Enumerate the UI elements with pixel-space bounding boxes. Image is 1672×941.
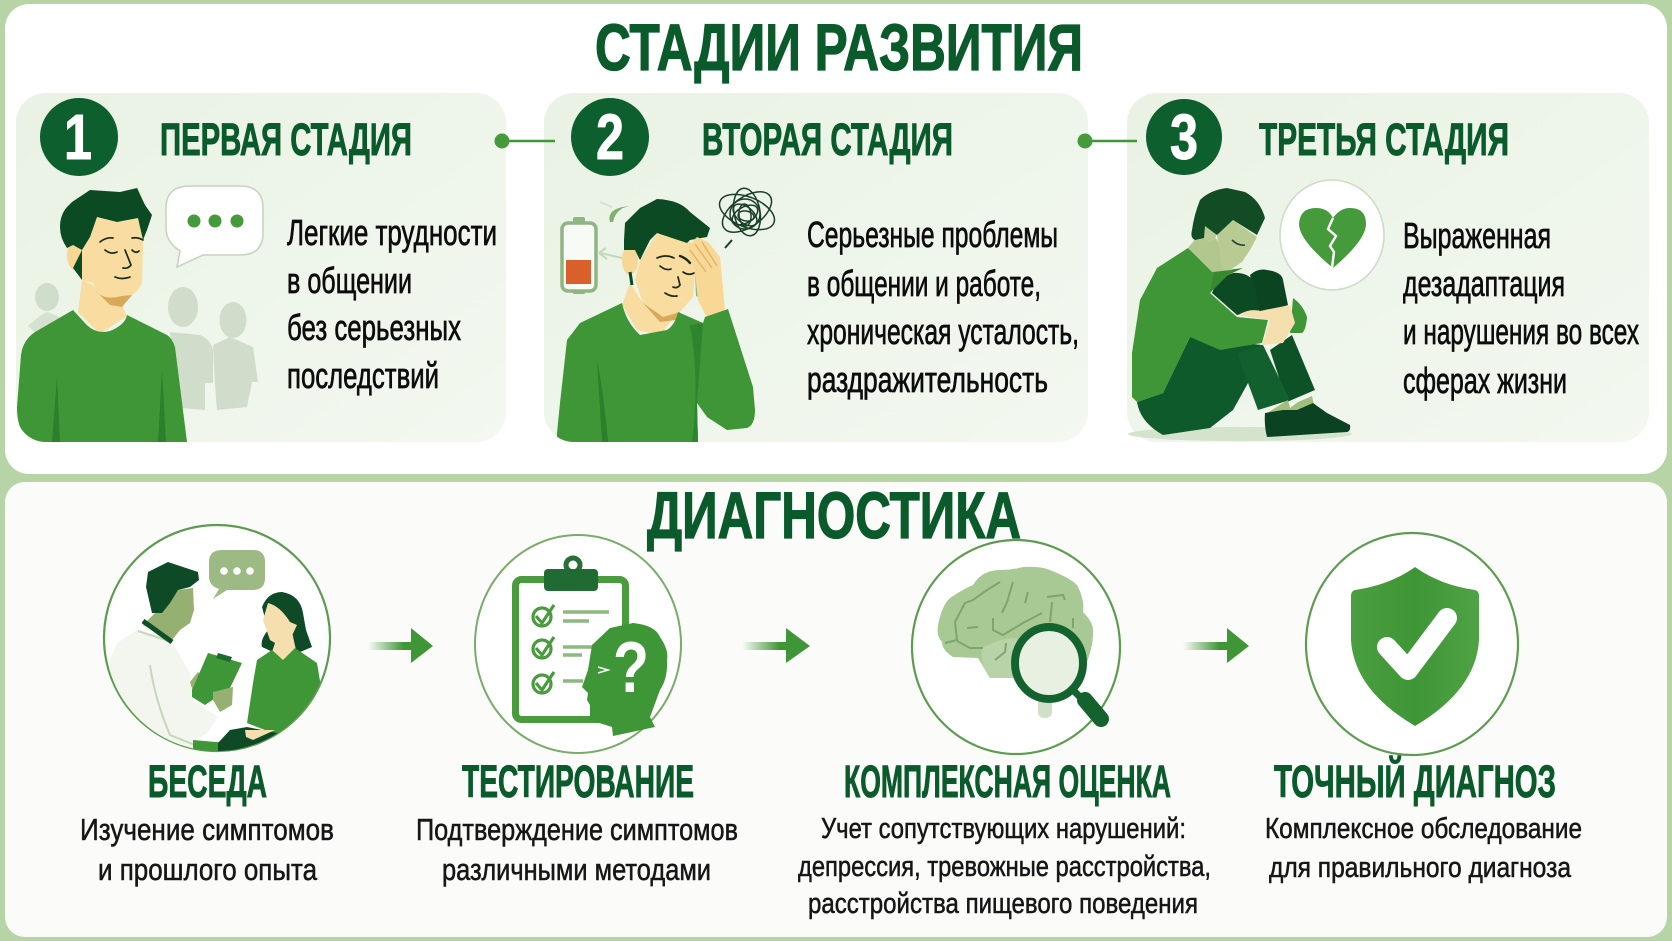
arrow: step 1 to 2 [368, 628, 433, 663]
text: first stage description: в общении [287, 260, 412, 301]
card: third stage [1127, 93, 1649, 442]
icon: number 1 badge: 1 [64, 101, 92, 173]
text: complex assessment description: расстройства пищевого поведения [808, 888, 1198, 920]
text: third stage description: дезадаптация [1403, 263, 1565, 304]
step: accurate diagnosis [1265, 533, 1582, 884]
title: diagnostics: ДИАГНОСТИКА [647, 478, 1021, 552]
icon: doctor and patient [104, 525, 330, 753]
icon: brain and magnifier [912, 540, 1120, 754]
icon: number 2 badge: 2 [596, 101, 624, 173]
text: second stage description: Серьезные проблемы [807, 214, 1058, 255]
illustration: person sitting curled [1128, 188, 1352, 441]
text: conversation description: Изучение симптомов [80, 812, 334, 847]
text: first stage description: последствий [287, 355, 439, 396]
panel: stages [5, 4, 1667, 474]
arrow: step 3 to 4 [1183, 628, 1249, 663]
text: complex assessment description [798, 813, 1211, 920]
panel: diagnostics [5, 478, 1667, 937]
text: second stage description: в общении и работе, [807, 263, 1041, 304]
heading: second stage: ВТОРАЯ СТАДИЯ [702, 114, 953, 165]
text: accurate diagnosis description: Комплексное обследование [1265, 813, 1582, 845]
heading: first stage: ПЕРВАЯ СТАДИЯ [160, 114, 412, 165]
illustration: calm man [17, 188, 187, 442]
step: testing [416, 535, 738, 887]
heading: third stage: ТРЕТЬЯ СТАДИЯ [1259, 114, 1509, 165]
icon: number 2 badge [571, 98, 649, 176]
icon: number 3 badge: 3 [1170, 101, 1198, 173]
connector: stage 1 to stage 2 [494, 134, 555, 148]
icon: broken heart [1280, 180, 1384, 290]
heading: conversation: БЕСЕДА [148, 756, 267, 807]
illustration: background people [28, 283, 258, 410]
icon: clipboard and head [475, 535, 681, 753]
text: accurate diagnosis description: для правильного диагноза [1269, 852, 1572, 884]
text: complex assessment description: Учет сопутствующих нарушений: [821, 813, 1186, 845]
text: first stage description: Легкие трудности [287, 212, 497, 253]
text: second stage description: хроническая усталость, [807, 311, 1079, 352]
text: second stage description [807, 214, 1079, 400]
title: stages: СТАДИИ РАЗВИТИЯ [595, 10, 1083, 84]
icon: shield with check [1306, 533, 1518, 755]
text: complex assessment description: депрессия, тревожные расстройства, [798, 851, 1211, 883]
icon: speech bubble [166, 186, 263, 267]
text: first stage description [287, 212, 497, 396]
text: testing description: различными методами [442, 852, 711, 887]
connector: stage 2 to stage 3 [1078, 134, 1137, 148]
icon: number 3 badge [1146, 99, 1222, 175]
icon: low battery [562, 202, 630, 294]
text: third stage description: сферах жизни [1403, 360, 1567, 401]
text: testing description: Подтверждение симптомов [416, 812, 738, 847]
icon: number 1 badge [40, 98, 118, 176]
card: second stage [544, 93, 1088, 442]
text: third stage description [1403, 215, 1639, 401]
step: complex assessment [798, 540, 1211, 920]
heading: testing: ТЕСТИРОВАНИЕ [462, 756, 694, 807]
icon: clipboard and head: ? [613, 628, 649, 708]
heading: complex assessment: КОМПЛЕКСНАЯ ОЦЕНКА [844, 756, 1171, 807]
text: second stage description: раздражительность [807, 359, 1048, 400]
icon: tangled thoughts [714, 184, 780, 248]
arrow: step 2 to 3 [742, 628, 810, 663]
text: conversation description [80, 812, 334, 887]
text: first stage description: без серьезных [287, 307, 461, 348]
card: first stage [16, 93, 506, 442]
illustration: tired man [557, 199, 755, 442]
step: conversation [80, 525, 334, 887]
text: third stage description: Выраженная [1403, 215, 1551, 256]
text: accurate diagnosis description [1265, 813, 1582, 884]
text: conversation description: и прошлого опыта [98, 852, 318, 887]
text: testing description [416, 812, 738, 887]
